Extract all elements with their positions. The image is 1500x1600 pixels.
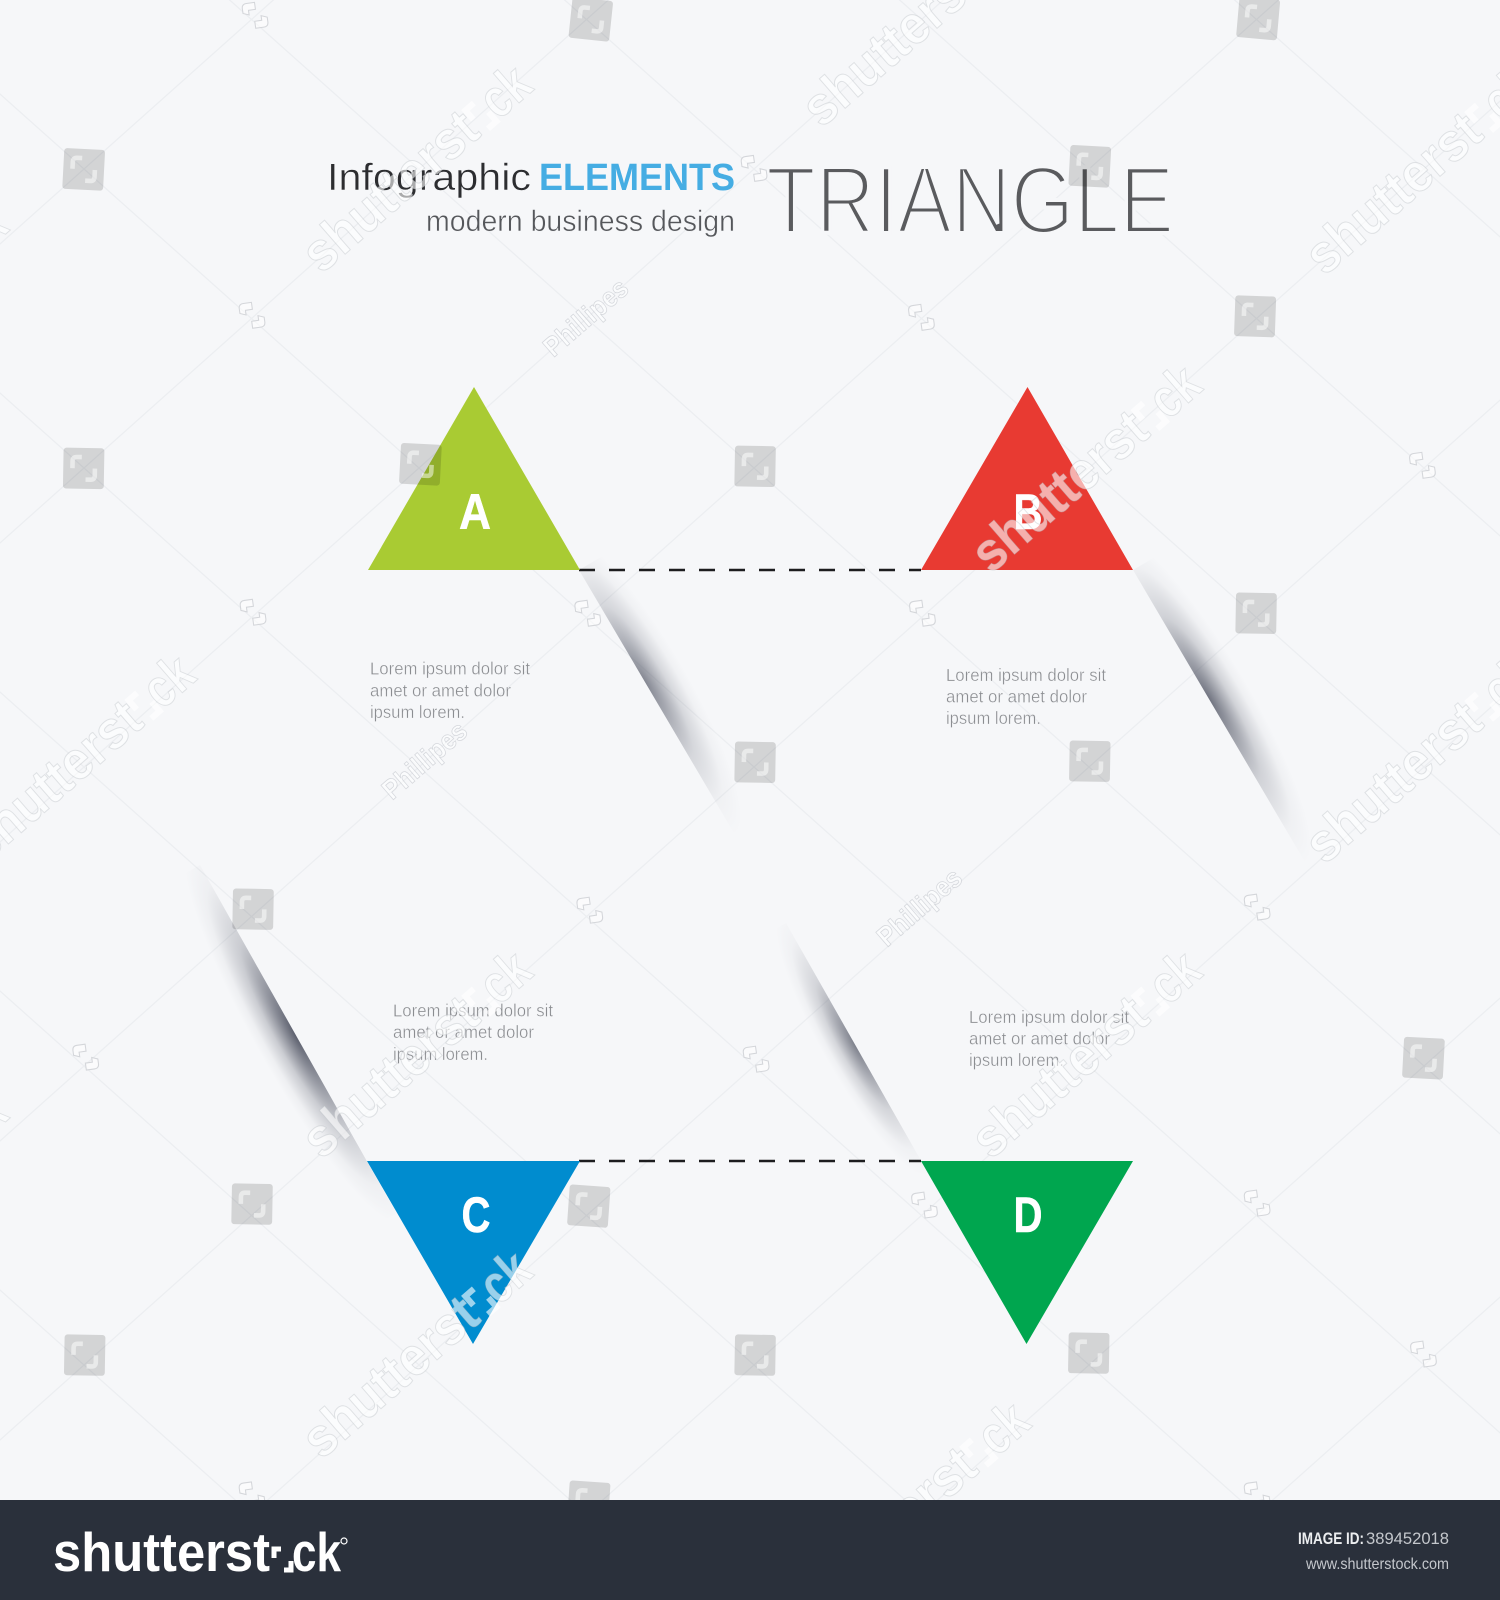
triangle D — [921, 1161, 1133, 1344]
watermark overlay: Phillipes — [376, 715, 473, 805]
watermark overlay: Phillipes — [871, 862, 968, 952]
text block C: Lorem ipsum dolor sit — [393, 1000, 553, 1020]
text block C — [393, 1000, 553, 1064]
title: ELEMENTS: ELEMENTS — [539, 157, 735, 199]
image id: IMAGE ID: — [1298, 1529, 1364, 1548]
text block D — [969, 1007, 1129, 1070]
triangle A: A — [459, 484, 491, 540]
site url: www.shutterstock.com — [1305, 1556, 1449, 1573]
text block D: ipsum lorem. — [969, 1050, 1064, 1070]
text block A: amet or amet dolor — [370, 680, 511, 700]
shadow: triangle C fold — [207, 886, 380, 1184]
title: TRIANGLE: TRIANGLE — [766, 147, 1174, 254]
text block C: ipsum lorem. — [393, 1044, 488, 1064]
text block A: ipsum lorem. — [370, 702, 465, 722]
text block D: amet or amet dolor — [969, 1028, 1110, 1048]
subtitle: modern business design — [426, 205, 735, 238]
triangle B: B — [1014, 484, 1042, 540]
watermark overlay: Phillipes — [537, 272, 634, 362]
footer logo: shutterst — [53, 1521, 270, 1583]
shadow: triangle A fold — [580, 565, 720, 800]
title — [327, 147, 1174, 254]
triangle A — [368, 387, 580, 570]
triangle C — [367, 1161, 580, 1344]
text block A — [370, 658, 530, 722]
triangle C: C — [462, 1187, 490, 1243]
footer bar: 389452018 — [1366, 1529, 1449, 1548]
shadow: triangle B fold — [1134, 570, 1290, 828]
footer bar — [0, 1500, 1500, 1600]
text block C: amet or amet dolor — [393, 1022, 534, 1042]
shadow: triangle D fold — [794, 944, 912, 1146]
text block B: Lorem ipsum dolor sit — [946, 665, 1106, 685]
title: Infographic: Infographic — [327, 157, 531, 199]
footer logo: ck — [292, 1521, 341, 1583]
text block B — [946, 665, 1106, 728]
text block B: ipsum lorem. — [946, 708, 1041, 728]
text block D: Lorem ipsum dolor sit — [969, 1007, 1129, 1027]
dashed connector top — [579, 569, 921, 571]
text block A: Lorem ipsum dolor sit — [370, 658, 530, 678]
triangle B — [921, 387, 1133, 570]
triangle D: D — [1014, 1187, 1042, 1243]
dashed connector bottom — [579, 1160, 921, 1162]
text block B: amet or amet dolor — [946, 686, 1087, 706]
